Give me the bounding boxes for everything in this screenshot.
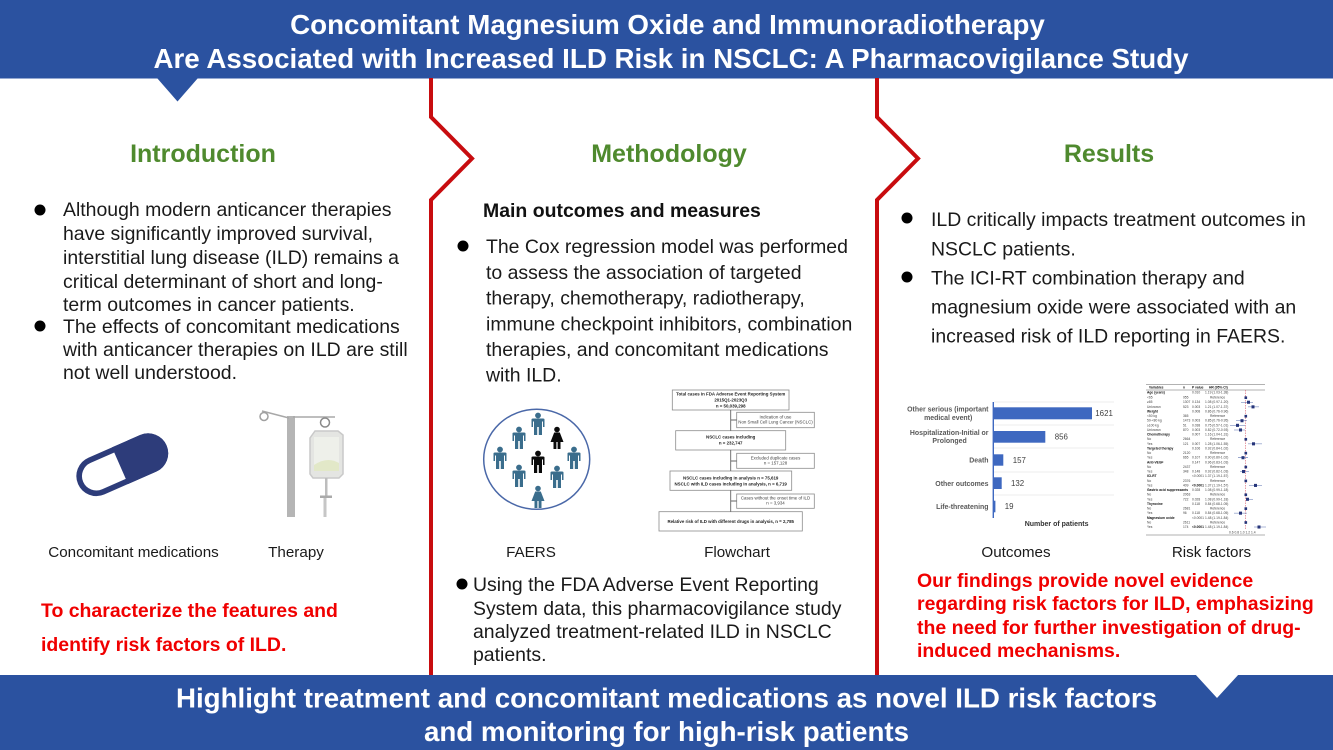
- forest plot: risk factors: Variables: [1149, 386, 1164, 390]
- forest plot: risk factors: 0.007: [1192, 433, 1200, 437]
- bar chart: outcomes: Life-threatening: [936, 504, 988, 511]
- forest plot: risk factors: Yes: [1147, 511, 1153, 515]
- callout: findings: regarding risk factors for ILD, emphasizing: [917, 593, 1314, 615]
- caption: risk factors: Risk factors: [1172, 544, 1252, 561]
- bar chart: outcomes: Other outcomes: [935, 481, 989, 488]
- icon: FAERS population: [484, 409, 590, 509]
- forest plot: risk factors: ICI-RT: [1147, 474, 1157, 478]
- forest plot: risk factors: 955: [1183, 396, 1189, 400]
- heading: methodology: Methodology: [591, 140, 747, 168]
- forest plot: risk factors: 523: [1183, 405, 1189, 409]
- forest plot: risk factors: 0.148: [1192, 470, 1200, 474]
- forest plot: risk factors: [1146, 384, 1266, 535]
- forest plot: risk factors: 1.16 (1.04-1.31): [1205, 433, 1228, 437]
- forest plot: risk factors: Reference: [1210, 493, 1225, 497]
- forest plot: risk factors: 722: [1183, 497, 1189, 501]
- panel: methodology: [456, 140, 852, 666]
- forest plot: risk factors: ≥100 kg: [1147, 423, 1159, 427]
- forest plot: risk factors: 51: [1183, 423, 1187, 427]
- forest plot: risk factors: 409: [1183, 483, 1189, 487]
- forest plot: risk factors: Chemotherapy: [1147, 433, 1170, 437]
- bullet list: introduction: The effects of concomitant medications: [63, 316, 400, 338]
- forest plot: risk factors: 1.48 (1.19-1.84): [1205, 525, 1228, 529]
- bullet list: cox model: The Cox regression model was performed: [486, 236, 848, 258]
- forest plot: risk factors: Unknown: [1147, 405, 1161, 409]
- flowchart: [659, 390, 814, 531]
- forest plot: risk factors: 0.90 (0.80-1.02): [1205, 456, 1228, 460]
- forest plot: risk factors: Reference: [1210, 479, 1225, 483]
- forest plot: risk factors: Reference: [1210, 396, 1225, 400]
- forest plot: risk factors: 0.107: [1192, 456, 1200, 460]
- forest plot: risk factors: 1.37 (1.19-1.57): [1205, 474, 1228, 478]
- forest plot: risk factors: 96: [1183, 511, 1187, 515]
- forest plot: risk factors: 1.37 (1.19-1.57): [1205, 483, 1228, 487]
- forest plot: risk factors: No: [1147, 479, 1151, 483]
- flowchart: Non Small Cell Lung Cancer (NSCLC): [738, 420, 813, 424]
- forest plot: risk factors: 365: [1183, 414, 1189, 418]
- bar chart: outcomes: 856: [1055, 432, 1068, 442]
- bullet list: results: increased risk of ILD reporting in FAERS.: [931, 326, 1285, 348]
- forest plot: risk factors: No: [1147, 451, 1151, 455]
- bullet list: cox model: therapy, chemotherapy, radiotherapy,: [486, 288, 805, 310]
- forest plot: risk factors: 1.19 (1.03-1.38): [1205, 390, 1228, 395]
- heading: introduction: Introduction: [130, 140, 276, 168]
- forest plot: risk factors: 0.106: [1192, 446, 1200, 450]
- flowchart: NSCLC cases including in analysis n = 75,619: [683, 476, 779, 480]
- conclusion: and monitoring for high-risk patients: [424, 716, 909, 747]
- flowchart: Relative risk of ILD with different drugs in analysis, n = 2,785: [667, 519, 795, 524]
- forest plot: risk factors: 50-<80 kg: [1147, 419, 1162, 423]
- bullet list: pharmacovigilance: System data, this pharmacovigilance study: [473, 598, 842, 620]
- conclusion: Highlight treatment and concomitant medications as novel ILD risk factors: [176, 682, 1157, 714]
- forest plot: risk factors: <0.0001: [1192, 483, 1204, 487]
- bullet list: introduction: have significantly improved survival,: [63, 223, 373, 245]
- forest plot: risk factors: Thyroxine: [1147, 502, 1163, 506]
- forest plot: risk factors: Anti-VEGF: [1147, 460, 1163, 464]
- forest plot: risk factors: <0.0001: [1192, 525, 1204, 529]
- forest plot: risk factors: 0.007: [1192, 442, 1200, 446]
- bullet list: cox model: [458, 236, 852, 386]
- forest plot: risk factors: Gastric acid suppressants: [1147, 488, 1188, 492]
- forest plot: risk factors: 2681: [1183, 507, 1190, 511]
- bar chart: outcomes: 19: [1005, 502, 1014, 511]
- bullet list: introduction: Although modern anticancer therapies: [63, 199, 392, 221]
- forest plot: risk factors: 0.75 (0.57-1.01): [1205, 423, 1228, 427]
- forest plot: risk factors: 0.028: [1192, 497, 1200, 501]
- heading: results: Results: [1064, 140, 1154, 168]
- forest plot: risk factors: Yes: [1147, 525, 1153, 529]
- bar chart: outcomes: medical event): [924, 415, 972, 422]
- caption: outcomes: Outcomes: [981, 544, 1051, 561]
- forest plot: risk factors: Reference: [1210, 437, 1225, 441]
- bar chart: outcomes: 132: [1011, 479, 1024, 488]
- forest plot: risk factors: 1.08 (0.97-1.20): [1205, 400, 1228, 404]
- bar chart: outcomes: [907, 402, 1114, 528]
- flowchart: n = 3,934: [766, 501, 785, 506]
- forest plot: risk factors: 348: [1183, 470, 1189, 474]
- forest plot: risk factors: Yes: [1147, 483, 1153, 487]
- forest plot: risk factors: <0.0001: [1192, 516, 1204, 520]
- panel: introduction: [34, 140, 408, 656]
- forest plot: risk factors: ≥65: [1147, 400, 1153, 404]
- forest plot: risk factors: Unknown: [1147, 428, 1161, 432]
- bar chart: outcomes: Other serious (important: [907, 406, 989, 414]
- flowchart: n = 50,039,298: [716, 403, 746, 408]
- forest plot: risk factors: 0.96 (0.83-1.03): [1205, 460, 1228, 464]
- caption: therapy: Therapy: [268, 544, 324, 561]
- forest plot: risk factors: No: [1147, 493, 1151, 497]
- forest plot: risk factors: No: [1147, 520, 1151, 524]
- subheading: main outcomes: Main outcomes and measures: [483, 200, 761, 222]
- flowchart: n = 232,747: [719, 441, 743, 446]
- forest plot: risk factors: 1.08 (0.99-1.18): [1205, 497, 1228, 501]
- bullet list: results: NSCLC patients.: [931, 238, 1076, 260]
- forest plot: risk factors: 2611: [1183, 520, 1190, 524]
- flowchart: NSCLC cases including: [706, 435, 756, 440]
- callout: aim: To characterize the features and: [41, 600, 338, 622]
- forest plot: risk factors: 0.118: [1192, 502, 1200, 506]
- forest plot: risk factors: 2063: [1183, 493, 1190, 497]
- bullet list: introduction: not well understood.: [63, 362, 237, 384]
- forest plot: risk factors: Reference: [1210, 507, 1225, 511]
- forest plot: risk factors: 0.6 0.8 1.0 1.2 1.4: [1229, 530, 1256, 534]
- forest plot: risk factors: Age (years): [1147, 390, 1165, 395]
- title: Concomitant Magnesium Oxide and Immunoradiotherapy: [290, 9, 1045, 40]
- forest plot: risk factors: <65: [1147, 396, 1153, 400]
- forest plot: risk factors: 174: [1183, 525, 1189, 529]
- forest plot: risk factors: 870: [1183, 428, 1189, 432]
- bullet list: introduction: with anticancer therapies on ILD are still: [62, 339, 408, 361]
- callout: findings: [917, 570, 1314, 662]
- conclusion: [176, 682, 1157, 747]
- forest plot: risk factors: 0.85 (0.76-0.95): [1205, 419, 1228, 423]
- divider arrow: methodology to results: [877, 78, 918, 675]
- bullet list: introduction: [34, 199, 408, 384]
- flowchart: n = 157,128: [764, 460, 788, 466]
- forest plot: risk factors: 0.82 (0.72-0.93): [1205, 428, 1228, 432]
- bar chart: outcomes: Death: [969, 458, 988, 464]
- forest plot: risk factors: 2664: [1183, 437, 1190, 441]
- bar chart: outcomes: 1621: [1095, 409, 1113, 418]
- callout: findings: induced mechanisms.: [917, 640, 1120, 662]
- callout: findings: the need for further investigation of drug-: [917, 617, 1301, 639]
- forest plot: risk factors: Yes: [1147, 442, 1153, 446]
- divider arrow: introduction to methodology: [431, 78, 472, 675]
- header banner: [0, 0, 1333, 102]
- caption: FAERS: FAERS: [506, 544, 556, 561]
- forest plot: risk factors: 665: [1183, 456, 1189, 460]
- flowchart: 2015Q1-2023Q3: [714, 398, 748, 402]
- forest plot: risk factors: Yes: [1147, 470, 1153, 474]
- bullet list: results: magnesium oxide were associated with an: [931, 296, 1296, 318]
- forest plot: risk factors: HR (95% CI): [1209, 386, 1228, 390]
- footer banner: [0, 674, 1333, 750]
- forest plot: risk factors: 0.134: [1192, 400, 1200, 404]
- forest plot: risk factors: 0.147: [1192, 460, 1200, 464]
- flowchart: Indication of use: [760, 414, 792, 420]
- forest plot: risk factors: 0.010: [1192, 390, 1200, 395]
- forest plot: risk factors: 0.038: [1192, 423, 1200, 427]
- forest plot: risk factors: Reference: [1210, 414, 1225, 418]
- bar chart: outcomes: Number of patients: [1025, 521, 1089, 528]
- forest plot: risk factors: <0.0001: [1192, 474, 1204, 478]
- forest plot: risk factors: 2437: [1183, 465, 1190, 469]
- bar chart: outcomes: Prolonged: [932, 438, 967, 445]
- bullet list: pharmacovigilance: [456, 574, 842, 666]
- forest plot: risk factors: 121: [1183, 442, 1189, 446]
- forest plot: risk factors: No: [1147, 437, 1151, 441]
- caption: flowchart: Flowchart: [704, 544, 771, 561]
- forest plot: risk factors: Weight: [1147, 409, 1159, 414]
- bullet list: introduction: interstitial lung disease (ILD) remains a: [63, 247, 399, 269]
- forest plot: risk factors: 2376: [1183, 479, 1190, 483]
- bullet list: results: [902, 209, 1306, 348]
- bullet list: cox model: therapies, and concomitant medications: [486, 339, 829, 361]
- bullet list: pharmacovigilance: Using the FDA Adverse Event Reporting: [473, 574, 819, 596]
- forest plot: risk factors: Reference: [1210, 465, 1225, 469]
- forest plot: risk factors: <50 kg: [1147, 414, 1157, 418]
- bar chart: outcomes: Hospitalization-Initial or: [910, 430, 989, 437]
- bullet list: introduction: critical determinant of short and long-: [63, 271, 383, 293]
- forest plot: risk factors: 1.28 (1.06-1.55): [1205, 442, 1228, 446]
- forest plot: risk factors: 1.21 (1.07-1.37): [1205, 405, 1228, 409]
- callout: aim: [41, 600, 338, 656]
- forest plot: risk factors: n: [1183, 386, 1185, 390]
- forest plot: risk factors: 0.84 (0.68-1.05): [1205, 502, 1228, 506]
- forest plot: risk factors: 0.84 (0.68-1.05): [1205, 511, 1228, 515]
- title: Are Associated with Increased ILD Risk in NSCLC: A Pharmacovigilance Study: [153, 43, 1189, 74]
- forest plot: risk factors: 0.92 (0.82-1.03): [1205, 470, 1228, 474]
- forest plot: risk factors: Yes: [1147, 456, 1153, 460]
- flowchart: Cases without the onset time of ILD: [741, 496, 810, 501]
- forest plot: risk factors: No: [1147, 465, 1151, 469]
- icon: infusion stand: [260, 411, 343, 517]
- callout: aim: identify risk factors of ILD.: [41, 634, 286, 656]
- forest plot: risk factors: 0.118: [1192, 511, 1200, 515]
- bullet list: results: ILD critically impacts treatment outcomes in: [931, 209, 1306, 231]
- flowchart: Total cases in FDA Adverse Event Reporting System: [676, 392, 785, 396]
- bullet list: cox model: immune checkpoint inhibitors, combination: [486, 314, 852, 336]
- forest plot: risk factors: 1473: [1183, 419, 1190, 423]
- forest plot: risk factors: 0.003: [1192, 428, 1200, 432]
- bar chart: outcomes: 157: [1013, 456, 1026, 465]
- bullet list: cox model: to assess the association of targeted: [486, 262, 802, 284]
- bullet list: introduction: term outcomes in cancer patients.: [63, 294, 355, 316]
- forest plot: risk factors: 0.008: [1192, 409, 1200, 414]
- icon: capsule: [73, 427, 174, 501]
- flowchart: Excluded duplicate cases: [751, 456, 801, 460]
- callout: findings: Our findings provide novel evidence: [917, 570, 1253, 592]
- forest plot: risk factors: No: [1147, 507, 1151, 511]
- forest plot: risk factors: 0.028: [1192, 488, 1200, 492]
- flowchart: NSCLC with ILD cases including in analysis, n = 6,719: [675, 482, 787, 486]
- forest plot: risk factors: 0.003: [1192, 405, 1200, 409]
- bullet list: pharmacovigilance: analyzed treatment-related ILD in NSCLC: [473, 621, 832, 643]
- title: [153, 9, 1189, 74]
- forest plot: risk factors: Yes: [1147, 497, 1153, 501]
- forest plot: risk factors: 1307: [1183, 400, 1190, 404]
- forest plot: risk factors: 2120: [1183, 451, 1190, 455]
- panel: results: [902, 140, 1314, 662]
- bullet list: cox model: with ILD.: [485, 364, 562, 386]
- forest plot: risk factors: 1.48 (1.19-1.84): [1205, 516, 1228, 520]
- forest plot: risk factors: Reference: [1210, 520, 1225, 524]
- forest plot: risk factors: 0.92 (0.84-1.02): [1205, 446, 1228, 450]
- forest plot: risk factors: Reference: [1210, 451, 1225, 455]
- forest plot: risk factors: Targeted therapy: [1147, 446, 1174, 450]
- forest plot: risk factors: Magnesium oxide: [1147, 516, 1175, 520]
- forest plot: risk factors: P value: [1192, 386, 1204, 390]
- forest plot: risk factors: 1.08 (0.99-1.18): [1205, 488, 1228, 492]
- bullet list: pharmacovigilance: patients.: [473, 644, 546, 666]
- bullet list: results: The ICI-RT combination therapy and: [931, 268, 1245, 290]
- forest plot: risk factors: 0.003: [1192, 419, 1200, 423]
- caption: concomitant medications: Concomitant medications: [48, 544, 219, 561]
- forest plot: risk factors: 0.86 (0.76-0.96): [1205, 409, 1228, 414]
